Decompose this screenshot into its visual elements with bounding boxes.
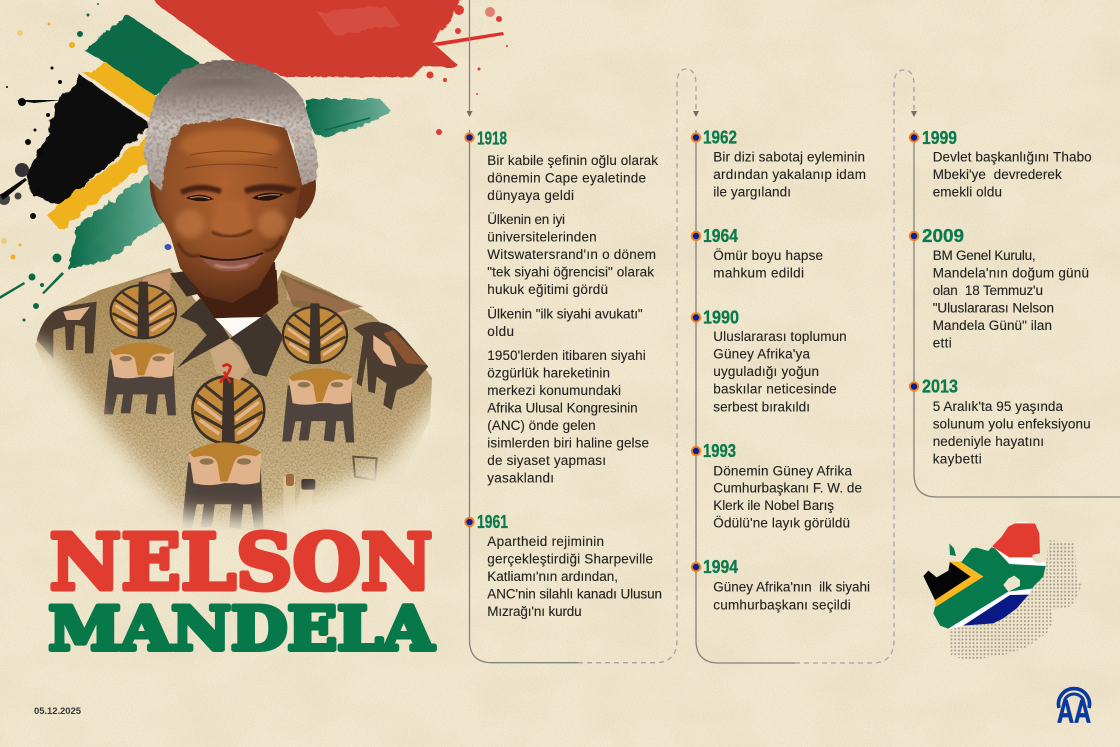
milestone markers [692, 133, 700, 571]
1961 entry: Apartheid rejiminin [487, 534, 604, 549]
1918 entry: 1950'lerden itibaren siyahi [487, 348, 646, 363]
1961 entry: Mızrağı'nı kurdu [487, 604, 582, 619]
portrait of Nelson Mandela [35, 60, 432, 530]
1999 entry [922, 127, 1092, 200]
paint splatter [0, 3, 172, 322]
2009 entry: "Uluslararası Nelson [933, 300, 1054, 315]
1999 entry: Devlet başkanlığını Thabo [933, 150, 1092, 165]
date: 05.12.2025 [34, 706, 82, 717]
1994 entry: 1994 [703, 556, 739, 577]
milestone markers [910, 133, 918, 391]
1962 entry: Bir dizi sabotaj eyleminin [713, 150, 865, 165]
1993 entry: Ödülü'ne layık görüldü [713, 516, 850, 531]
1993 entry: Klerk ile Nobel Barış [713, 498, 834, 513]
flag: yellow lower band [46, 137, 147, 230]
1994 entry: Güney Afrika'nın ilk siyahi [713, 580, 870, 595]
1993 entry: Dönemin Güney Afrika [713, 463, 852, 478]
flag splash [0, 0, 508, 322]
1964 entry: mahkum edildi [713, 265, 804, 280]
1990 entry: Uluslararası toplumun [713, 329, 847, 344]
1961 entry [477, 511, 662, 619]
flag: yellow upper band [82, 64, 158, 120]
1918 entry: (ANC) önde gelen [487, 418, 596, 433]
2009 entry: olan 18 Temmuz'u [933, 283, 1043, 298]
AA logo [1057, 689, 1091, 730]
flag: green lower band [68, 167, 165, 270]
2013 entry: nedeniyle hayatını [933, 434, 1044, 449]
1999 entry: 1999 [922, 127, 957, 148]
timeline column 1 [465, 128, 662, 619]
1918 entry: 1918 [477, 128, 507, 148]
1994 entry: cumhurbaşkanı seçildi [713, 597, 851, 612]
1964 entry: Ömür boyu hapse [713, 248, 823, 263]
flag-filled country shape [924, 522, 1046, 630]
title line: NELSON: NELSON [50, 518, 432, 608]
1993 entry [703, 440, 862, 531]
1961 entry: Katliamı'nın ardından, [487, 569, 618, 584]
1990 entry: Güney Afrika'ya [713, 347, 810, 362]
2009 entry [922, 225, 1089, 350]
2009 entry: Mandela'nın doğum günü [933, 265, 1089, 280]
1918 entry: oldu [487, 324, 514, 339]
timeline column 3 [910, 127, 1092, 466]
1962 entry [703, 126, 866, 200]
1918 entry: isimlerden biri haline gelse [487, 436, 649, 451]
1999 entry: Mbeki'ye devrederek [933, 167, 1062, 182]
1990 entry: serbest bırakıldı [713, 399, 810, 414]
dotted map shadow [949, 540, 1082, 661]
2013 entry: kaybetti [933, 451, 982, 466]
facial features [175, 129, 298, 271]
1990 entry: uyguladığı yoğun [713, 364, 819, 379]
2013 entry: solunum yolu enfeksiyonu [933, 416, 1091, 431]
flag: green upper band [84, 15, 200, 98]
1964 entry: 1964 [703, 225, 739, 246]
2013 entry [922, 376, 1091, 466]
flag: black triangle [26, 75, 152, 205]
1990 entry: baskılar neticesinde [713, 382, 837, 397]
flag: green right band [305, 99, 392, 138]
1918 entry [477, 128, 658, 486]
face [152, 116, 302, 303]
ears [150, 176, 316, 226]
1918 entry: dönemin Cape eyaletinde [487, 171, 646, 186]
milestone markers [465, 133, 474, 526]
2013 entry: 5 Aralık'ta 95 yaşında [933, 399, 1063, 414]
timeline connector [466, 0, 1120, 663]
title: Nelson Mandela [48, 518, 435, 664]
1990 entry: 1990 [703, 306, 739, 328]
1990 entry [703, 306, 847, 414]
northern flag sliver [949, 543, 956, 556]
1918 entry: Witswatersrand'ın o dönem [487, 247, 656, 262]
1962 entry: 1962 [703, 126, 737, 148]
1993 entry: Cumhurbaşkanı F. W. de [713, 481, 862, 496]
2009 entry: Mandela Günü" ilan [933, 318, 1052, 333]
1918 entry: merkezi konumundaki [487, 383, 621, 398]
1993 entry: 1993 [703, 440, 736, 461]
1961 entry: 1961 [477, 511, 508, 532]
title line: MANDELA: MANDELA [48, 594, 435, 664]
2009 entry: etti [933, 335, 952, 350]
hair [144, 60, 318, 192]
map of South Africa with flag [920, 520, 1082, 661]
1918 entry: hukuk eğitimi gördü [487, 282, 608, 297]
1918 entry: yasaklandı [487, 471, 554, 486]
2013 entry: 2013 [922, 376, 958, 397]
1918 entry: Bir kabile şefinin oğlu olarak [487, 153, 658, 168]
AA logo: AA [1057, 694, 1091, 730]
1918 entry: özgürlük hareketinin [487, 365, 610, 380]
1918 entry: Ülkenin "ilk siyahi avukatı" [487, 306, 643, 321]
timeline column 2 [692, 126, 870, 612]
1994 entry [703, 556, 870, 612]
1918 entry: üniversitelerinden [487, 230, 597, 245]
2009 entry: 2009 [922, 225, 964, 246]
1961 entry: gerçekleştirdiği Sharpeville [487, 551, 653, 566]
flag: red band [140, 0, 508, 135]
1964 entry [703, 225, 823, 280]
2009 entry: BM Genel Kurulu, [933, 248, 1036, 263]
neck [186, 262, 277, 318]
1918 entry: dünyaya geldi [487, 188, 574, 203]
1999 entry: emekli oldu [933, 185, 1002, 200]
1918 entry: Afrika Ulusal Kongresinin [487, 401, 638, 416]
1962 entry: ardından yakalanıp idam [713, 167, 866, 182]
1918 entry: de siyaset yapması [487, 453, 606, 468]
shirt [35, 268, 432, 530]
1961 entry: ANC'nin silahlı kanadı Ulusun [487, 587, 662, 602]
1918 entry: "tek siyahi öğrencisi" olarak [487, 265, 654, 280]
1962 entry: ile yargılandı [713, 185, 791, 200]
1918 entry: Ülkenin en iyi [487, 212, 565, 227]
